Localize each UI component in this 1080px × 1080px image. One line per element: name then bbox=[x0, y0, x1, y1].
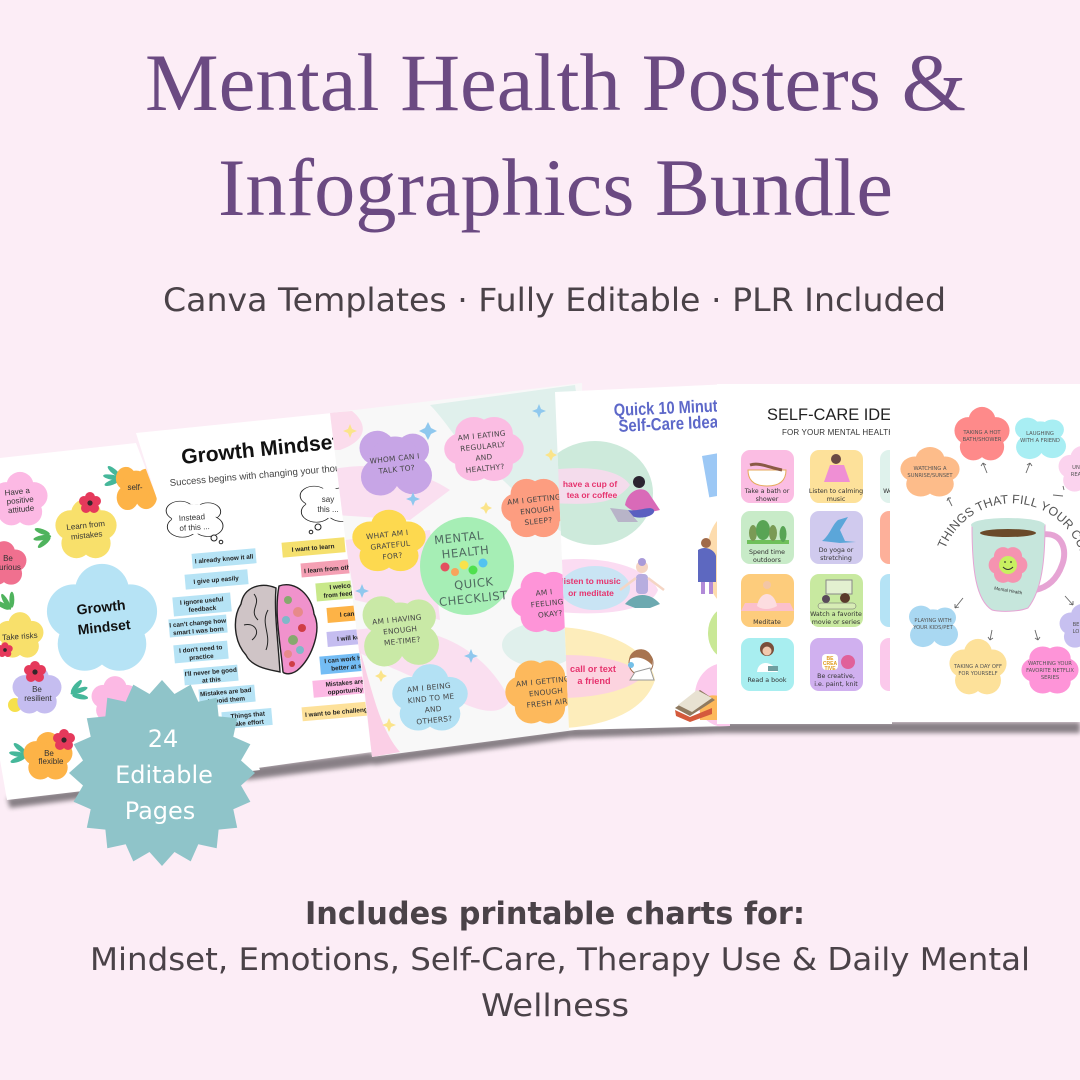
tile: creative: Be creative, bbox=[817, 673, 855, 680]
heading: Self-Care Ideas bbox=[618, 411, 727, 436]
blob: day off: FOR YOURSELF bbox=[958, 671, 998, 677]
blob: clipped lavender: LO bbox=[1073, 629, 1079, 635]
blob: centre title bbox=[420, 517, 514, 615]
flower: self: self- bbox=[127, 483, 143, 492]
poster fan bbox=[0, 383, 1080, 811]
growth mindset list bbox=[282, 537, 378, 721]
flower: positive attitude: Have a bbox=[4, 486, 31, 498]
blob: clipped pink bbox=[1059, 446, 1080, 492]
blob: feeling okay bbox=[511, 572, 565, 632]
blob: hot bath: BATH/SHOWER bbox=[963, 437, 1002, 443]
fixed mindset list: take effort bbox=[233, 719, 265, 728]
blob: feeling okay: AM I bbox=[535, 587, 553, 598]
blob: kids bbox=[909, 606, 958, 647]
tile: bath: shower bbox=[756, 496, 779, 503]
flower: learn from mistakes: mistakes bbox=[71, 529, 103, 542]
flower: self bbox=[101, 464, 157, 510]
flower: be flexible: Be bbox=[44, 749, 54, 758]
flower: be curious: Be bbox=[3, 554, 13, 563]
page 5: self-care ideas bbox=[717, 384, 913, 724]
flower: take risks: Take risks bbox=[2, 631, 38, 642]
tile: clipped mint bbox=[880, 450, 900, 503]
tile: bath bbox=[741, 450, 794, 503]
idea: music or meditate bbox=[560, 558, 664, 613]
flower: positive attitude bbox=[0, 472, 48, 525]
blob: sunrise: WATCHING A bbox=[913, 466, 947, 472]
blob: netflix bbox=[1021, 646, 1079, 694]
blob: kind: AND bbox=[424, 704, 442, 715]
tile: clipped blue bbox=[880, 574, 900, 627]
blob: kids: PLAYING WITH bbox=[914, 618, 952, 624]
idea: tea or coffee: tea or coffee bbox=[567, 490, 618, 500]
blob: fresh air: ENOUGH bbox=[529, 686, 564, 698]
cloud: instead of this bbox=[166, 501, 223, 544]
blob: centre title: QUICK bbox=[454, 574, 494, 592]
growth mindset list: I can try bbox=[340, 610, 365, 619]
footer text: Mindset, Emotions, Self-Care, Therapy Use & Daily Mental bbox=[90, 942, 1030, 978]
blob: eating: AND bbox=[475, 452, 493, 463]
tile: music bbox=[809, 450, 863, 503]
illustration: mug: Mental Health bbox=[994, 586, 1023, 596]
blob: eating: REGULARLY bbox=[460, 440, 506, 453]
cloud: say this: say bbox=[322, 495, 334, 504]
flower: positive attitude: positive bbox=[6, 495, 35, 506]
blob: sunrise bbox=[900, 447, 960, 496]
title: Mental Health Posters & bbox=[145, 37, 966, 128]
flower: growth mindset: Mindset bbox=[77, 616, 132, 638]
blob: clipped pink: UN bbox=[1072, 465, 1080, 471]
blob: fresh air bbox=[505, 661, 575, 723]
flower: be resilient: Be bbox=[32, 685, 42, 694]
flower: be resilient bbox=[8, 661, 92, 714]
footer heading: Includes printable charts for: bbox=[305, 896, 805, 932]
flower: hidden pink bbox=[92, 676, 132, 717]
blob: feeling okay: OKAY? bbox=[538, 608, 563, 620]
cloud: say this bbox=[300, 486, 357, 534]
blob: sleep: ENOUGH bbox=[520, 504, 555, 517]
tile: clipped salmon bbox=[880, 511, 900, 564]
illustration: pink and books bbox=[675, 664, 730, 726]
illustration: brain bbox=[235, 585, 317, 674]
flower: take risks bbox=[0, 588, 43, 658]
growth mindset list: Mistakes are bbox=[325, 678, 365, 689]
fixed mindset list bbox=[168, 548, 273, 729]
icon: hearts bbox=[440, 558, 488, 576]
page 3: mental health quick checklist bbox=[326, 383, 600, 757]
blob: whom can I talk to: TALK TO? bbox=[377, 463, 415, 476]
tile: yoga: Do yoga or bbox=[819, 547, 854, 554]
fixed mindset list: feedback bbox=[188, 605, 217, 614]
idea: tea or coffee bbox=[558, 441, 660, 545]
tile: meditate: Meditate bbox=[753, 619, 781, 626]
page 2: growth mindset statements bbox=[136, 413, 378, 770]
illustration: girl on phone bbox=[628, 649, 654, 680]
blob: centre title: CHECKLIST bbox=[438, 588, 509, 609]
tile: meditate bbox=[741, 574, 794, 627]
title bbox=[145, 37, 966, 233]
blob: grateful: FOR? bbox=[382, 551, 403, 562]
fixed mindset list: I already know it all bbox=[195, 553, 254, 566]
blob: eating: AM I EATING bbox=[457, 429, 506, 443]
blob: me-time: ENOUGH bbox=[383, 624, 418, 637]
illustration: woman with laptop bbox=[610, 476, 660, 522]
blob: feeling okay: FEELING bbox=[530, 597, 564, 609]
tile: read bbox=[741, 638, 794, 691]
footer text bbox=[90, 942, 1030, 1024]
blob: netflix: WATCHING YOUR bbox=[1028, 661, 1072, 667]
illustration: mug bbox=[971, 518, 1064, 611]
blob: grateful: GRATEFUL bbox=[370, 539, 411, 552]
blob: sleep: AM I GETTING bbox=[507, 492, 561, 507]
blob: hot bath: TAKING A HOT bbox=[962, 430, 1001, 436]
icon: arrows bbox=[947, 463, 1073, 640]
tile: movie: movie or series bbox=[812, 619, 860, 626]
tile: music: music bbox=[827, 496, 846, 503]
tile: read: Read a book bbox=[747, 677, 787, 684]
blob: kind: KIND TO ME bbox=[407, 691, 455, 705]
growth mindset list: I want to learn bbox=[291, 543, 335, 554]
growth mindset list: I learn from others bbox=[304, 563, 361, 575]
fixed mindset list: Mistakes are bad bbox=[200, 687, 252, 698]
blob: kind: OTHERS? bbox=[416, 714, 453, 727]
flower: learn from mistakes: Learn from bbox=[66, 519, 106, 532]
idea: call or text a friend: a friend bbox=[577, 676, 611, 686]
blob: whom can I talk to: WHOM CAN I bbox=[369, 451, 420, 466]
blob: kids: YOUR KIDS/PET bbox=[912, 625, 954, 631]
fixed mindset list: I ignore useful bbox=[180, 596, 224, 607]
blob: whom can I talk to bbox=[359, 431, 432, 496]
tile: creative: BE bbox=[827, 656, 834, 662]
blob: sleep: SLEEP? bbox=[524, 515, 553, 527]
page shadows bbox=[7, 722, 1080, 808]
title: Infographics Bundle bbox=[218, 142, 893, 233]
blob: fresh air: FRESH AIR? bbox=[526, 696, 572, 710]
illustration: meditating woman bbox=[620, 558, 664, 608]
blob: fresh air: AM I GETTING bbox=[516, 674, 570, 689]
blob: laughing: LAUGHING bbox=[1026, 431, 1054, 437]
footer text: Wellness bbox=[481, 988, 629, 1024]
blob: day off: TAKING A DAY OFF bbox=[953, 664, 1002, 670]
blob: laughing: WITH A FRIEND bbox=[1020, 438, 1060, 444]
badge: 24 editable pages: Editable bbox=[115, 761, 213, 789]
blob: me-time: ME-TIME? bbox=[384, 635, 421, 648]
page 1: growth mindset flowers bbox=[0, 443, 260, 800]
badge: 24 editable pages: 24 bbox=[148, 725, 178, 753]
flower: be resilient: resilient bbox=[24, 694, 53, 703]
fixed mindset list: practice bbox=[189, 653, 214, 662]
heading bbox=[613, 395, 727, 436]
cloud: instead of this: of this ... bbox=[179, 522, 210, 533]
tile: creative: i.e. paint, knit bbox=[814, 681, 858, 688]
idea: tea or coffee: have a cup of bbox=[563, 479, 617, 489]
blob: eating: HEALTHY? bbox=[465, 462, 505, 475]
flower: growth mindset: Growth bbox=[76, 597, 126, 618]
fixed mindset list: at this bbox=[202, 676, 222, 685]
badge: 24 editable pages: Pages bbox=[125, 797, 195, 825]
cloud: instead of this: Instead bbox=[178, 512, 205, 523]
subheading: FOR YOUR MENTAL HEALTH bbox=[782, 428, 894, 437]
fixed mindset list: I give up easily bbox=[193, 575, 240, 586]
fixed mindset list: smart I was born bbox=[173, 626, 224, 637]
growth mindset list: I can work hard bbox=[324, 654, 371, 665]
flower: be curious bbox=[0, 541, 26, 585]
subheading: Success begins with changing your thoughts bbox=[169, 462, 359, 489]
blob: netflix: FAVORITE NETFLIX bbox=[1026, 668, 1074, 674]
blob: me-time bbox=[363, 596, 439, 666]
tile: yoga bbox=[810, 511, 863, 564]
idea: music or meditate: listen to music bbox=[561, 576, 621, 586]
cloud: say this: this ... bbox=[317, 505, 339, 514]
blob: sleep bbox=[501, 478, 560, 538]
flower: be flexible bbox=[7, 729, 75, 780]
page 4: quick 10 minute self-care ideas bbox=[555, 384, 730, 730]
growth mindset list: better at so bbox=[331, 663, 366, 673]
tile: yoga: stretching bbox=[820, 555, 852, 562]
blob: kind bbox=[392, 664, 468, 730]
illustration: notebook bbox=[702, 453, 717, 498]
fixed mindset list: I don't need to bbox=[179, 644, 223, 655]
blob: clipped lavender: BE bbox=[1073, 622, 1079, 628]
idea: call or text a friend: call or text bbox=[570, 664, 616, 674]
blob: clipped lavender bbox=[1060, 604, 1080, 648]
icon: yellow sparkles bbox=[343, 424, 557, 732]
blob: grateful bbox=[352, 510, 426, 571]
tile: movie bbox=[810, 574, 863, 627]
tile: creative: CREA bbox=[823, 661, 837, 667]
fixed mindset list: Things that bbox=[230, 710, 266, 720]
blob: sunrise: SUNRISE/SUNSET bbox=[907, 473, 953, 479]
blob: laughing bbox=[1015, 418, 1066, 459]
blob: grateful: WHAT AM I bbox=[366, 528, 409, 541]
blob: day off bbox=[949, 639, 1007, 694]
tile: outdoors: Spend time bbox=[749, 549, 785, 556]
tile: outdoors: outdoors bbox=[753, 557, 781, 564]
illustration: peach shape and woman in coat bbox=[698, 521, 717, 599]
growth mindset list: I will keep bbox=[337, 634, 368, 643]
heading: SELF-CARE IDEAS bbox=[767, 405, 913, 424]
flower: growth mindset bbox=[47, 564, 157, 671]
fixed mindset list: I'll never be good bbox=[184, 667, 237, 678]
idea: call or text a friend bbox=[560, 627, 655, 728]
tile: creative bbox=[810, 638, 863, 691]
blob: centre title: MENTAL bbox=[434, 528, 484, 547]
badge: 24 editable pages bbox=[69, 680, 255, 866]
icon: smiley flower bbox=[989, 547, 1027, 583]
fixed mindset list: I avoid them bbox=[208, 695, 246, 706]
tile: clipped mint: We bbox=[883, 488, 893, 495]
blob: netflix: SERIES bbox=[1041, 675, 1059, 681]
subtitle: Canva Templates · Fully Editable · PLR Included bbox=[163, 281, 946, 319]
growth mindset list: from feedback bbox=[323, 589, 368, 600]
blob: hot bath bbox=[954, 407, 1010, 460]
tile: creative: TIVE bbox=[824, 666, 836, 672]
icon: sparkles bbox=[355, 404, 546, 663]
background swashes bbox=[330, 385, 576, 757]
blob: me-time: AM I HAVING bbox=[372, 612, 422, 627]
idea: music or meditate: or meditate bbox=[568, 588, 614, 598]
heading: Growth Mindset bbox=[180, 430, 340, 469]
blob: eating bbox=[444, 417, 524, 481]
fixed mindset list: I can't change how bbox=[169, 618, 226, 629]
growth mindset list: I want to be challenged bbox=[305, 706, 376, 719]
growth mindset list: I welcome bbox=[329, 582, 361, 591]
blob: centre title: HEALTH bbox=[441, 543, 490, 562]
page 6: things that fill your cup bbox=[890, 384, 1080, 722]
flower: learn from mistakes bbox=[31, 492, 117, 558]
flower: be flexible: flexible bbox=[39, 757, 64, 766]
heading: Quick 10 Minute bbox=[613, 395, 726, 420]
tile: outdoors bbox=[741, 511, 794, 564]
tile: movie: Watch a favorite bbox=[810, 611, 862, 618]
tile: clipped pink bbox=[880, 638, 900, 691]
flower: positive attitude: attitude bbox=[8, 504, 35, 515]
tile: music: Listen to calming bbox=[809, 488, 863, 495]
illustration: green shape bbox=[708, 612, 717, 654]
tile: bath: Take a bath or bbox=[744, 488, 790, 495]
growth mindset list: opportunity bbox=[327, 686, 364, 697]
blob: kind: AM I BEING bbox=[407, 681, 451, 694]
